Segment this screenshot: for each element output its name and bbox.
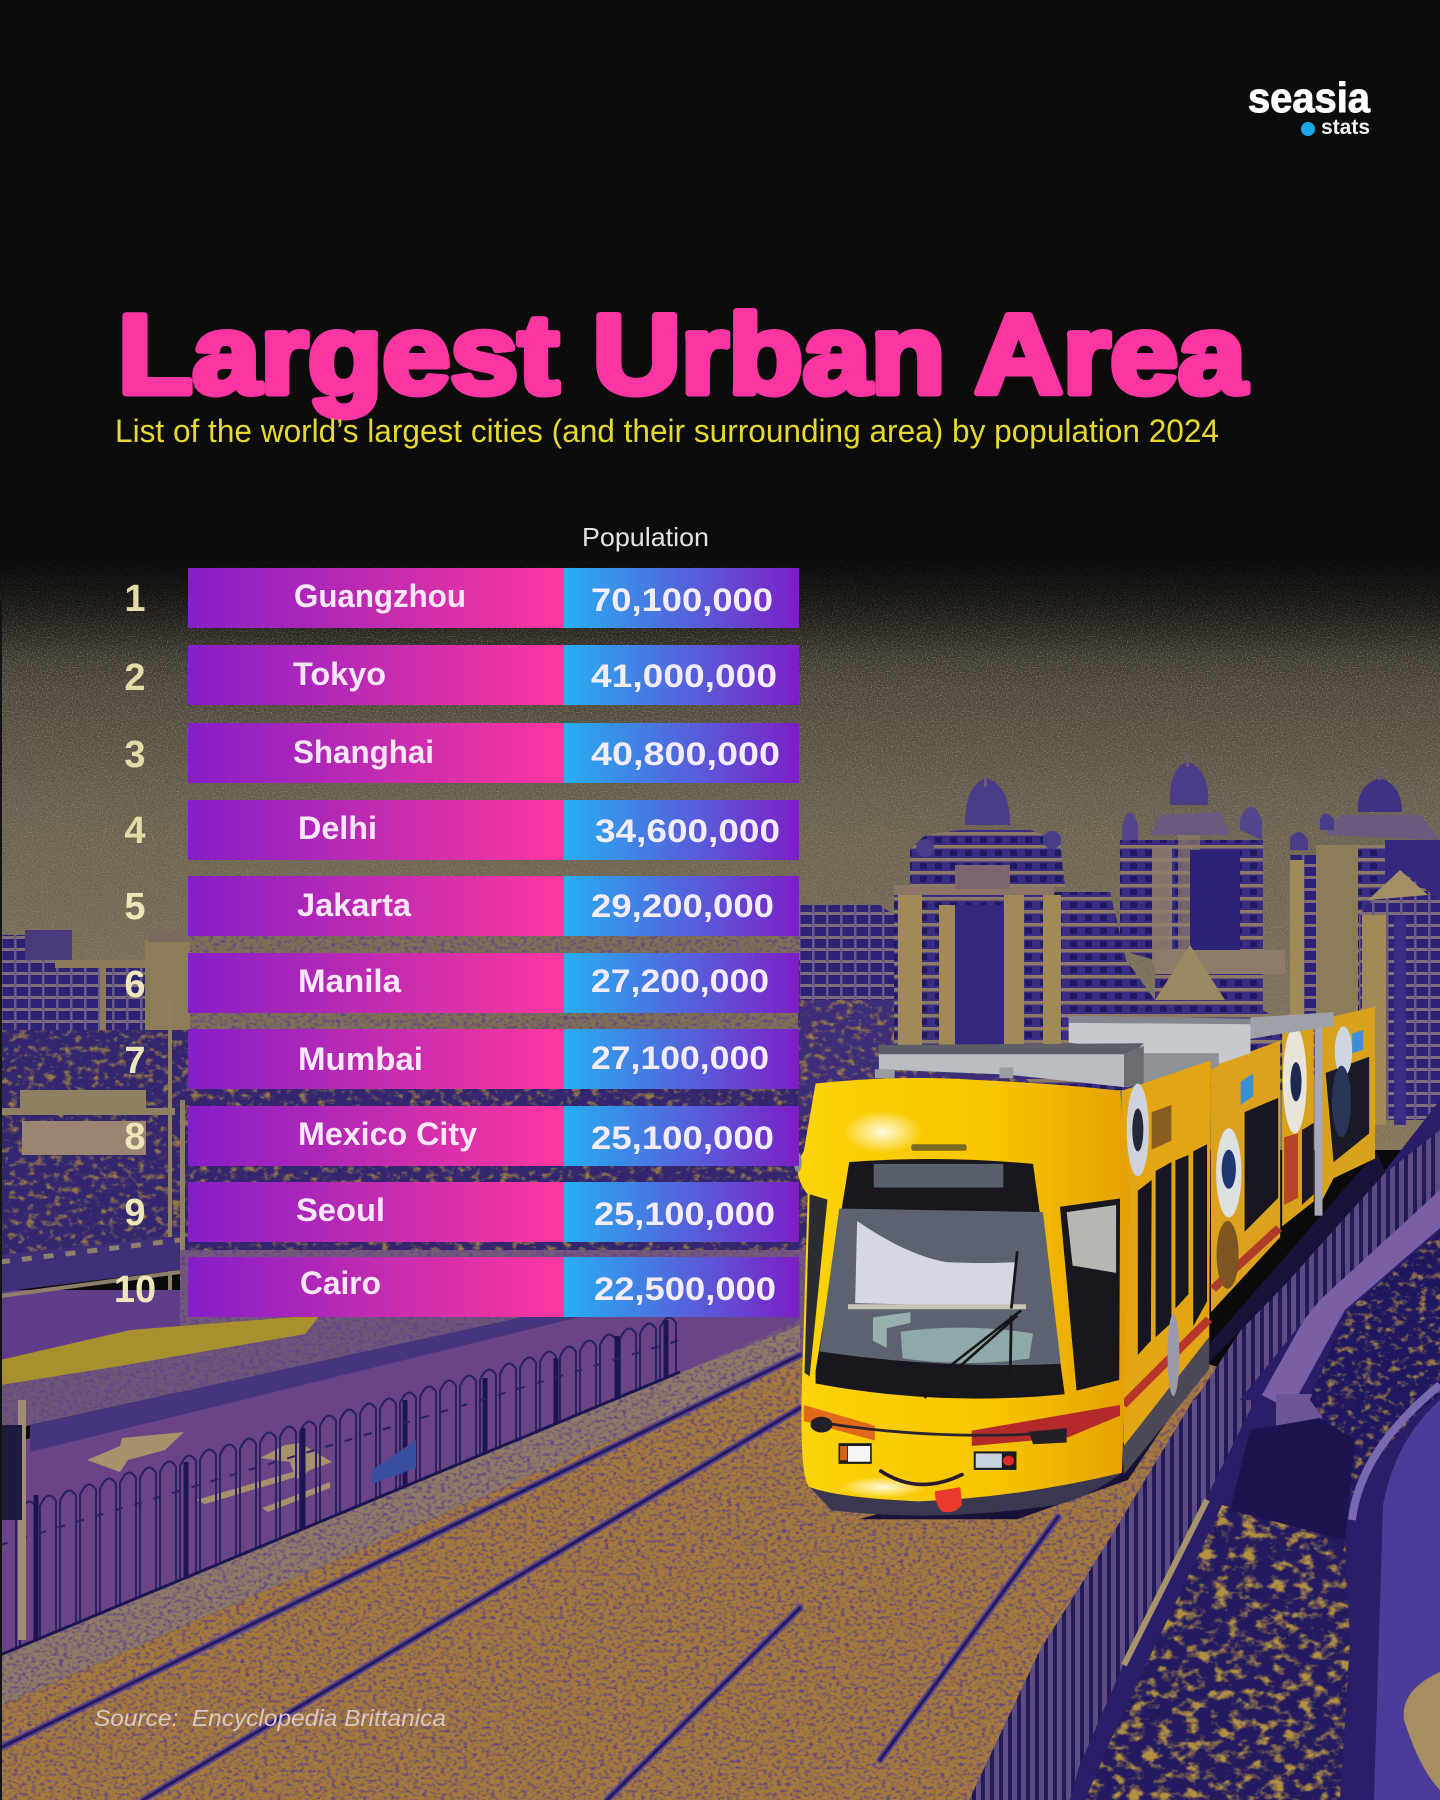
- row 10 Cairo: 10: [114, 1269, 156, 1311]
- bridge railing: [1195, 1130, 1440, 1400]
- row 2 Tokyo: 41,000,000: [591, 658, 777, 694]
- row 8 Mexico City: 8: [124, 1116, 146, 1158]
- row 7 Mumbai: Mumbai: [298, 1041, 423, 1077]
- row 1 Guangzhou: [124, 568, 799, 628]
- row 8 Mexico City: 25,100,000: [591, 1120, 774, 1156]
- row 6 Manila: [124, 953, 799, 1013]
- shrubs under the arch: [1310, 1232, 1440, 1500]
- right trees: [798, 960, 1088, 1120]
- roof boxes: [875, 1012, 1334, 1087]
- tram shadow: [859, 1151, 1385, 1519]
- row 5 Jakarta: 5: [124, 886, 146, 928]
- black fade over the top: [0, 0, 1440, 660]
- dashboard bar: [848, 1304, 1026, 1309]
- row 1 Guangzhou: Guangzhou: [294, 578, 466, 614]
- side cab window: [1060, 1199, 1120, 1391]
- logo word stats: stats: [1321, 116, 1370, 139]
- median wall: [30, 1300, 600, 1452]
- median strip: [0, 1285, 620, 1435]
- far strip behind median: [180, 1250, 810, 1400]
- row 9 Seoul: [124, 1182, 799, 1242]
- wipers: [918, 1251, 1021, 1398]
- row 4 Delhi: [124, 800, 799, 860]
- row 5 Jakarta: 29,200,000: [591, 888, 774, 924]
- destination display: [874, 1164, 1003, 1187]
- bumper highlight: [839, 1476, 926, 1498]
- orange stripe left: [804, 1405, 875, 1441]
- row 9 Seoul: Seoul: [296, 1192, 385, 1228]
- left headlight: [839, 1443, 872, 1464]
- roof vent: [911, 1144, 967, 1151]
- row 7 Mumbai: [124, 1029, 799, 1089]
- row 3 Shanghai: 3: [124, 734, 146, 776]
- row 1 Guangzhou: 1: [124, 578, 146, 620]
- tree line left: [0, 1030, 810, 1255]
- left apartment buildings: [0, 930, 203, 1072]
- row 2 Tokyo: [124, 645, 799, 705]
- left roadside fence: [0, 1318, 680, 1655]
- row 7 Mumbai: 27,100,000: [591, 1040, 769, 1076]
- left edge line: [0, 600, 2, 1800]
- foot path curb: [1352, 1385, 1440, 1520]
- right hedge with leaves: [1085, 1505, 1350, 1800]
- left lamp cluster: [810, 1417, 833, 1432]
- windshield glass: [820, 1209, 1061, 1365]
- row 5 Jakarta: Jakarta: [297, 887, 411, 923]
- tram bumper skirt: [810, 1473, 1122, 1515]
- bridge base and shrubs: [969, 1100, 1440, 1800]
- dash stripes: [873, 1312, 910, 1348]
- row 4 Delhi: 4: [124, 810, 146, 852]
- bridge pier: [1276, 1394, 1322, 1446]
- source note: Source: Encyclopedia Brittanica: [94, 1705, 446, 1731]
- logo globe dot: [1301, 122, 1315, 136]
- hedge: [0, 1315, 320, 1385]
- row 6 Manila: 27,200,000: [591, 963, 769, 999]
- interior curtain: [855, 1221, 1017, 1307]
- row 1 Guangzhou: 70,100,000: [591, 582, 773, 618]
- overhead sign gantry: [0, 1000, 185, 1340]
- subtitle: List of the world’s largest cities (and their surrounding area) by population 2024: [115, 413, 1219, 449]
- central road area: [0, 1262, 800, 1655]
- left side mirror: [794, 1152, 802, 1172]
- sunlit path patch: [1404, 1672, 1440, 1790]
- foot path: [1374, 1400, 1440, 1800]
- row 2 Tokyo: 2: [124, 657, 146, 699]
- windshield frame: [816, 1159, 1065, 1399]
- left cab window: [805, 1194, 827, 1376]
- smile: [881, 1471, 962, 1484]
- row 5 Jakarta: [124, 876, 799, 936]
- row 3 Shanghai: [124, 723, 799, 783]
- body highlights: [843, 1110, 922, 1153]
- logo word seasia: seasia: [1248, 74, 1371, 121]
- row 7 Mumbai: 7: [124, 1040, 146, 1082]
- rear carriage: [1315, 1007, 1375, 1216]
- row 2 Tokyo: Tokyo: [293, 656, 386, 692]
- row 8 Mexico City: Mexico City: [298, 1116, 477, 1152]
- right fence kerb: [1124, 1500, 1207, 1665]
- row 10 Cairo: 22,500,000: [594, 1271, 776, 1307]
- yellow tram: [794, 1007, 1385, 1519]
- row 10 Cairo: Cairo: [300, 1265, 381, 1301]
- ranking table: [114, 568, 799, 1317]
- street sign: [372, 1440, 416, 1484]
- bumper seam: [812, 1421, 1067, 1435]
- palace building one: [800, 775, 1155, 1090]
- third carriage: [1282, 1026, 1314, 1226]
- right headlight: [974, 1451, 1016, 1470]
- pavement strip: [0, 1325, 800, 1706]
- row 4 Delhi: 34,600,000: [595, 813, 780, 849]
- palace tower two: [1120, 755, 1285, 1090]
- row 3 Shanghai: Shanghai: [293, 734, 434, 770]
- bridge arch: [1262, 1190, 1440, 1410]
- row 6 Manila: Manila: [298, 963, 401, 999]
- row 10 Cairo: [114, 1257, 799, 1317]
- row 9 Seoul: 9: [124, 1192, 146, 1234]
- red stripe right: [972, 1405, 1120, 1446]
- side window glass: [1067, 1205, 1116, 1273]
- tram side panel: [1122, 1060, 1211, 1475]
- far roadside railing: [0, 1236, 180, 1296]
- title: Largest Urban Area: [118, 292, 1247, 417]
- dark sky gradient: [0, 0, 1440, 1150]
- palace tower three and front building: [1290, 768, 1440, 1125]
- row 6 Manila: 6: [124, 964, 146, 1006]
- population column header: Population: [582, 522, 709, 552]
- tongue: [935, 1487, 962, 1512]
- right side fence: [969, 1400, 1255, 1800]
- row 4 Delhi: Delhi: [298, 810, 377, 846]
- brand logo: [1248, 74, 1371, 139]
- row 8 Mexico City: [124, 1106, 799, 1166]
- upper dark hedge: [1230, 1418, 1355, 1540]
- row 9 Seoul: 25,100,000: [594, 1196, 775, 1232]
- track bed: [0, 1300, 1260, 1800]
- upper road: [0, 1290, 200, 1380]
- row 3 Shanghai: 40,800,000: [591, 736, 780, 772]
- dashboard console: [901, 1328, 1033, 1363]
- tram front body: [798, 1078, 1130, 1501]
- second carriage: [1211, 1041, 1280, 1312]
- mid-distance tan buildings behind the bars: [190, 930, 800, 1030]
- road arrows: [87, 1432, 332, 1512]
- right lamp cluster: [1029, 1428, 1067, 1444]
- traffic signal pole: [2, 1400, 26, 1640]
- tram rails: [0, 1355, 1058, 1800]
